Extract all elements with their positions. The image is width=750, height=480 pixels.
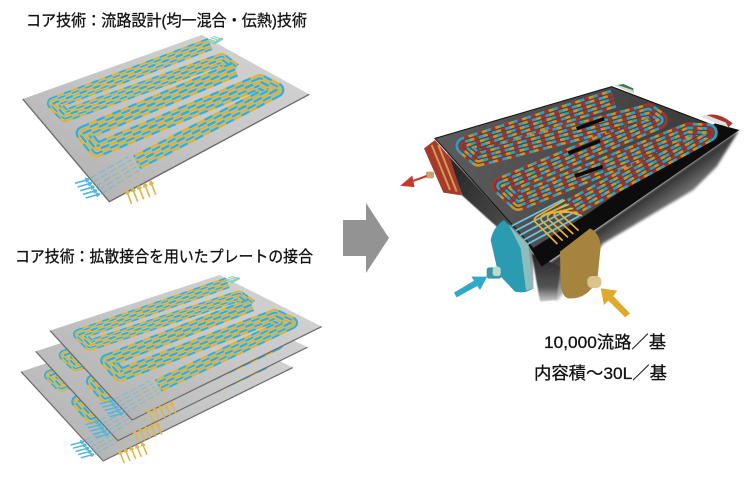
spec text: channel count: 10,000流路／基: [544, 333, 666, 352]
front manifold blue lines: [512, 199, 579, 244]
plate: single serpentine channel plate: [23, 33, 309, 204]
icon: red outlet arrow: [403, 176, 427, 186]
red outlet cap, top right: [702, 114, 733, 127]
reactor black rim: [528, 123, 739, 267]
plate: middle of stack: [36, 294, 307, 443]
reactor left side wall: [447, 153, 533, 290]
reactor front corner: [532, 253, 560, 302]
reactor: assembled block with headers: [403, 84, 739, 317]
reactor right side wall: [543, 130, 739, 302]
plate: bottom of stack: [21, 315, 293, 463]
icon: yellow inlet arrow: [601, 288, 630, 317]
reactor top face: [435, 87, 717, 248]
front manifold yellow lines: [535, 200, 582, 244]
yellow inlet header: [560, 228, 630, 317]
red outlet header: [403, 140, 462, 195]
plate stack: three bonded plates: [21, 274, 322, 463]
green outlet cap: [615, 84, 633, 93]
teal inlet header: [454, 220, 533, 297]
arrow: large grey process arrow: [343, 203, 389, 273]
title: channel design: コア技術：流路設計(均一混合・伝熱)技術: [26, 12, 307, 30]
reactor channels: [465, 99, 708, 207]
title: diffusion bonding: コア技術：拡散接合を用いたプレートの接合: [15, 248, 313, 266]
plate: top of stack: [50, 274, 322, 422]
icon: blue inlet arrow: [454, 277, 487, 297]
spec text: internal volume: 内容積〜30L／基: [534, 364, 667, 383]
